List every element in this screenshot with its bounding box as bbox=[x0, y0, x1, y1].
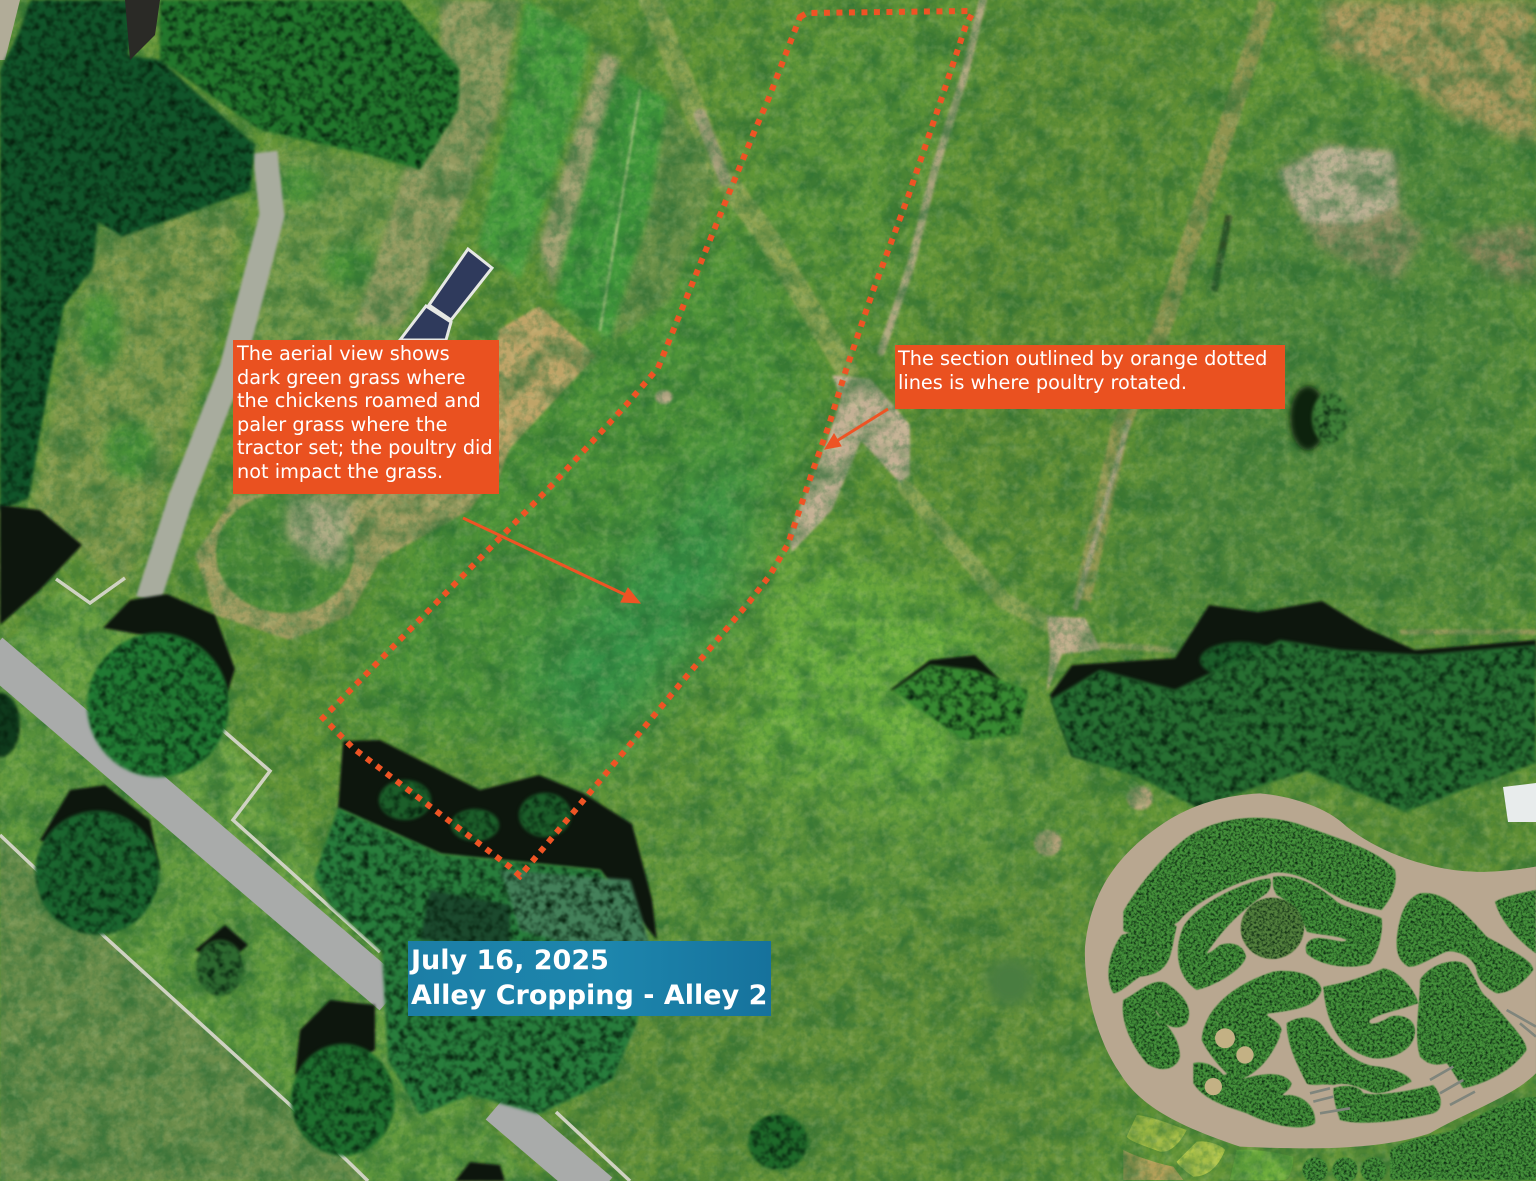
title: date and alley: Alley Cropping - Alley 2 bbox=[411, 980, 767, 1011]
date label background bbox=[408, 941, 771, 1016]
title: date and alley: July 16, 2025 bbox=[411, 945, 609, 976]
top corner road bbox=[0, 0, 20, 60]
white tent bbox=[1503, 783, 1536, 822]
mowed track right bbox=[1075, 0, 1536, 632]
orange dotted alley outline bbox=[323, 11, 972, 876]
paved road bbox=[0, 652, 392, 996]
green crowns inside the forest shadow bbox=[379, 642, 1280, 841]
field tones bbox=[340, 0, 1536, 1181]
bright beds at garden base bbox=[1123, 1115, 1293, 1180]
arrow: poultry callout bbox=[825, 409, 888, 449]
straw patch bbox=[350, 306, 596, 560]
pale bare patch bbox=[1278, 146, 1398, 225]
callout: dotted outline note bbox=[895, 345, 1285, 409]
garden paths bbox=[1085, 793, 1536, 1148]
pale meadow left of driveway bbox=[30, 200, 245, 590]
callout: grass colour note: The aerial view shows bbox=[237, 342, 450, 365]
hedge shadow gap bbox=[125, 0, 160, 60]
paved road, south stretch bbox=[498, 1105, 600, 1181]
callout: grass colour note: not impact the grass. bbox=[237, 460, 443, 482]
lower-left lawn bbox=[0, 835, 368, 1181]
garden beds bbox=[1108, 818, 1536, 1181]
olive slope right of driveway bbox=[232, 150, 460, 400]
shrub bbox=[893, 665, 1028, 741]
shadow of lone tree bbox=[1290, 386, 1326, 450]
east tree line bbox=[1050, 640, 1536, 812]
callout: dotted outline note: The section outlined by orange dotted bbox=[898, 347, 1267, 370]
callout: grass colour note: paler grass where the bbox=[237, 412, 448, 436]
farm tracks and sandy lane bbox=[600, 0, 1175, 650]
fences bbox=[0, 578, 630, 1181]
tree shadows bbox=[0, 505, 1536, 1181]
forest clump, south bbox=[314, 808, 650, 1115]
title: date and alley bbox=[409, 945, 767, 1011]
garden stairs bbox=[1310, 1010, 1536, 1113]
crop strips at top bbox=[355, 0, 720, 342]
arrow: grass callout bbox=[463, 518, 640, 603]
bare earth at crossing bbox=[655, 375, 1153, 856]
small meadow shrub bbox=[986, 958, 1034, 1006]
callout: grass colour note: tractor set; the poultry did bbox=[237, 436, 493, 459]
callout: grass colour note: the chickens roamed and bbox=[237, 389, 481, 412]
earthen ring around bed bbox=[195, 470, 498, 640]
paved driveway bbox=[148, 152, 272, 600]
spiral garden bbox=[1085, 793, 1536, 1181]
green patches in meadow bbox=[78, 165, 378, 480]
planted mounds bbox=[1205, 1028, 1254, 1095]
callout: grass colour note: dark green grass where bbox=[237, 366, 466, 388]
pale clearing in bed bbox=[285, 494, 353, 567]
circular bed by road bbox=[216, 493, 354, 613]
callout: dotted outline note: lines is where poultry rotated. bbox=[898, 370, 1187, 394]
round trees bbox=[0, 392, 1348, 1170]
top-right dry patches bbox=[1278, 0, 1536, 283]
callout: grass colour note bbox=[233, 340, 499, 494]
dark conifer hedge, top left bbox=[0, 0, 460, 510]
solar panels bbox=[400, 249, 492, 340]
